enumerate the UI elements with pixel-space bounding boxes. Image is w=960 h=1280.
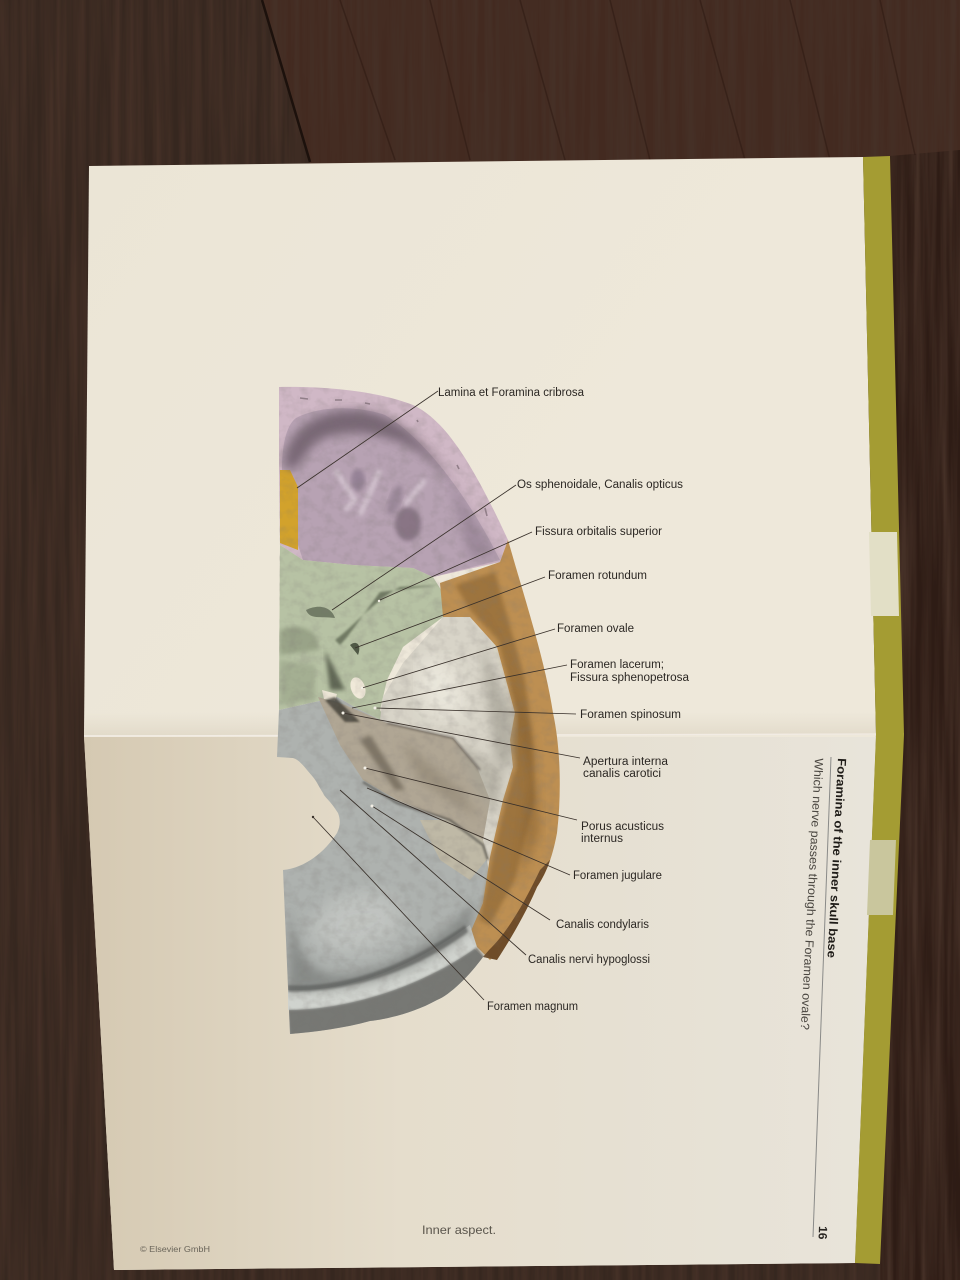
petrous shading [360,735,405,790]
foramen ovale opening [350,677,366,699]
temporal squama pale [380,617,515,857]
anatomical labels: Os sphenoidale, Canalis opticus [517,479,683,491]
question text, rotated: Which nerve passes through the Foramen ovale? [798,758,826,1031]
anatomical labels: Foramen ovale [557,623,634,635]
anatomical labels: Foramen magnum [487,1001,578,1013]
pale index tab upper [869,532,899,616]
anatomical labels: Apertura interna [583,756,669,768]
frontal bone purple [279,387,508,577]
sphenoid shadows [306,607,335,618]
anatomical labels [438,387,690,1013]
copyright: © Elsevier GmbH [140,1244,210,1254]
occipital fossa shading [286,903,477,996]
frontal inner fossa [282,408,500,577]
shading layers [270,380,570,1040]
fold crease [84,734,904,736]
foramen lacerum opening [322,690,337,701]
frontal bone pores [300,398,487,516]
anatomical labels: Foramen rotundum [548,570,647,582]
frontal fossa shadows [284,410,455,485]
anatomical labels: Canalis nervi hypoglossi [528,954,650,966]
open booklet paper [84,157,904,1270]
anatomical labels: internus [581,833,623,845]
pale index tab lower [867,840,896,915]
sphenoid bone green [279,545,443,723]
olive side tab strip [855,156,904,1264]
brown temporal and parietal band [440,540,560,960]
brown shading [508,690,542,868]
petrous ridge taupe [318,697,490,840]
card title, rotated: Foramina of the inner skull base [825,758,849,959]
anatomical labels: Foramen lacerum; [570,659,664,671]
anatomical labels: Lamina et Foramina cribrosa [438,387,585,399]
skull base illustration [270,380,570,1040]
anatomical labels: Foramen spinosum [580,709,681,721]
anatomical labels: canalis carotici [583,768,661,780]
cribriform plate yellow [280,470,298,550]
title divider rule [813,757,831,1237]
anatomical labels: Fissura sphenopetrosa [570,672,690,684]
anatomical labels: Foramen jugulare [573,870,662,882]
caption: Inner aspect. [422,1223,496,1237]
occipital bone grey [277,697,490,1034]
leader lines [297,391,580,1000]
occipital cut surface pale band [288,925,477,1010]
anatomical labels: Fissura orbitalis superior [535,526,662,538]
anatomical labels: Canalis condylaris [556,919,649,931]
mottled mastoid area [420,820,488,880]
anatomical labels: Porus acusticus [581,821,664,833]
darker brown inner band [455,572,535,925]
page number: 16 [816,1226,830,1240]
texture noise [279,387,559,1009]
foramen marker dots [312,600,380,818]
dark outer rim of brown band [483,860,550,960]
temporal fossa shading [480,640,515,770]
